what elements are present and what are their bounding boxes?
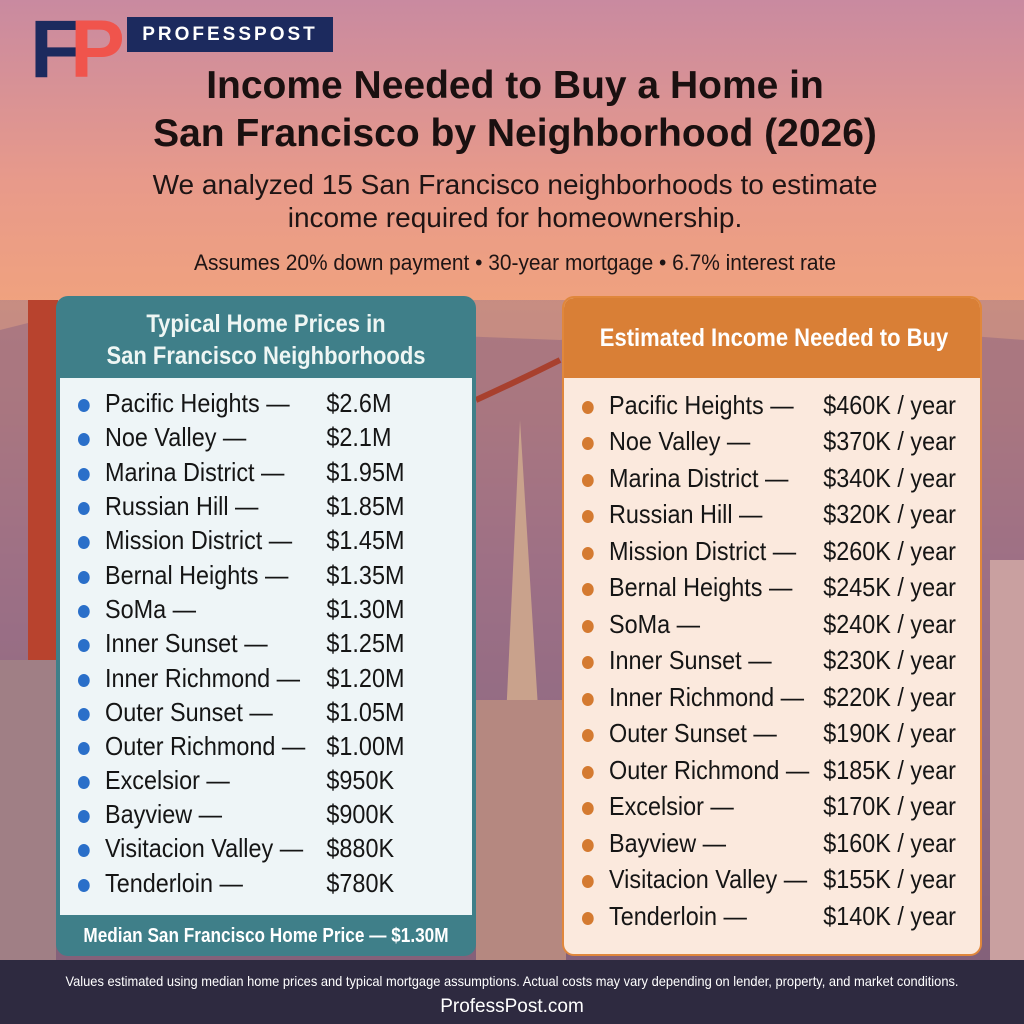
price list: $1.45M [326,525,404,555]
income list: $230K / year [823,645,956,675]
heading: income: Estimated Income Needed to Buy [600,324,948,352]
income list: $220K / year [823,682,956,712]
title [153,64,877,155]
price list: Outer Sunset — [105,697,273,727]
income list: Inner Sunset — [609,645,772,675]
price list: Mission District — [105,525,292,555]
price list: Excelsior — [105,765,230,795]
footnote: Values estimated using median home prices and typical mortgage assumptions. Actual costs may vary depending on lender, property, and market conditions. [65,973,959,989]
price list: Inner Sunset — [105,628,268,658]
price list: Tenderloin — [105,868,243,898]
income list: Outer Richmond — [609,755,809,785]
income list: Tenderloin — [609,901,747,931]
income list: $160K / year [823,828,956,858]
price list: $2.1M [326,422,391,452]
price list: Russian Hill — [105,491,258,521]
income list: $140K / year [823,901,956,931]
price list [60,378,472,915]
heading: home prices: San Francisco Neighborhoods [106,342,426,370]
income list: Outer Sunset — [609,718,777,748]
title: Income Needed to Buy a Home in [206,64,824,107]
income list: Pacific Heights — [609,390,794,420]
income list: $340K / year [823,463,956,493]
price list: Visitacion Valley — [105,833,303,863]
price list: $1.25M [326,628,404,658]
income list: Noe Valley — [609,426,750,456]
panel: home prices [56,296,476,956]
price list: $1.05M [326,697,404,727]
assumptions: Assumes 20% down payment • 30-year mortgage • 6.7% interest rate [194,250,836,275]
income list: $170K / year [823,791,956,821]
price list: $780K [326,868,394,898]
price list: $950K [326,765,394,795]
income list: $460K / year [823,390,956,420]
title: San Francisco by Neighborhood (2026) [153,112,877,155]
price list: Pacific Heights — [105,388,290,418]
income list: $155K / year [823,864,956,894]
income list: $260K / year [823,536,956,566]
heading: home prices [106,310,426,370]
price list: $1.20M [326,663,404,693]
median callout: Median San Francisco Home Price — $1.30M [83,925,449,947]
price list: Inner Richmond — [105,663,300,693]
subtitle: income required for homeownership. [288,202,742,233]
income list: $370K / year [823,426,956,456]
income list: Bayview — [609,828,726,858]
price list: $1.35M [326,560,404,590]
logo: FP [30,4,115,95]
price list: $2.6M [326,388,391,418]
price list: $1.30M [326,594,404,624]
price list: $900K [326,799,394,829]
logo [30,4,333,95]
income list: Bernal Heights — [609,572,792,602]
subtitle: We analyzed 15 San Francisco neighborhoods to estimate [153,169,877,200]
income list: Visitacion Valley — [609,864,807,894]
income list: $320K / year [823,499,956,529]
price list: Noe Valley — [105,422,246,452]
income list: SoMa — [609,609,700,639]
price list: Bayview — [105,799,222,829]
income list: $185K / year [823,755,956,785]
income list: Marina District — [609,463,788,493]
income list: Excelsior — [609,791,734,821]
price list: Bernal Heights — [105,560,288,590]
price list: $1.95M [326,457,404,487]
income list: $240K / year [823,609,956,639]
price list: Marina District — [105,457,284,487]
income list: $245K / year [823,572,956,602]
heading: home prices: Typical Home Prices in [146,310,386,338]
footer url: ProfessPost.com [440,996,584,1017]
income list: $190K / year [823,718,956,748]
income list: Russian Hill — [609,499,762,529]
price list: $1.00M [326,731,404,761]
price list: Outer Richmond — [105,731,305,761]
price list: SoMa — [105,594,196,624]
income list: Inner Richmond — [609,682,804,712]
income list: Mission District — [609,536,796,566]
panel: income needed [562,296,982,956]
subtitle [152,169,877,233]
price list: $1.85M [326,491,404,521]
logo: PROFESSPOST [142,24,318,45]
income list [582,390,956,931]
heading: income [564,298,984,378]
price list: $880K [326,833,394,863]
